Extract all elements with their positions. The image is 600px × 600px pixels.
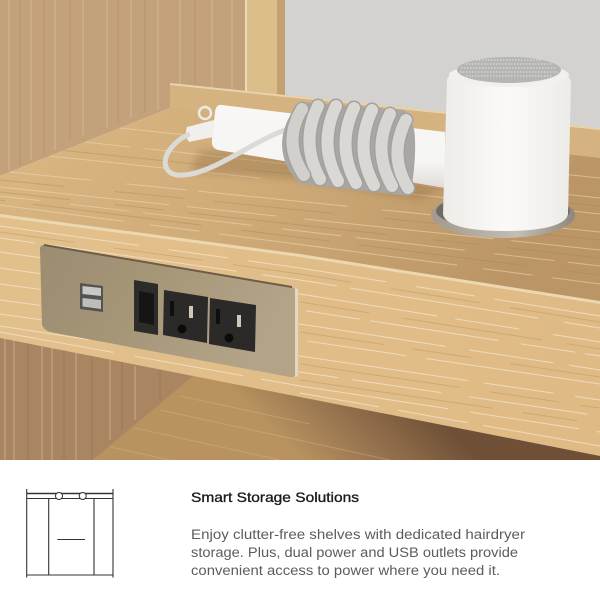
usb ports	[80, 283, 103, 312]
hairdryer	[165, 57, 571, 231]
hairdryer grille	[457, 57, 561, 83]
hairdryer barrel	[443, 67, 571, 231]
power cord	[165, 130, 285, 175]
hairdryer rim	[449, 63, 569, 87]
coiled cord	[282, 102, 415, 196]
body text: storage. Plus, dual power and USB outlets provide	[191, 545, 518, 560]
shelf top surface	[0, 108, 600, 302]
cabinet side panel	[0, 0, 245, 176]
wall	[285, 0, 600, 135]
body text: convenient access to power where you need it.	[191, 563, 500, 578]
body text: Enjoy clutter-free shelves with dedicated hairdryer	[191, 527, 526, 542]
icon: shelf elevation line drawing	[27, 489, 113, 578]
shelf front edge	[0, 214, 600, 456]
hairdryer handle	[212, 105, 445, 188]
heading: Smart Storage Solutions	[191, 489, 359, 505]
back ledge	[170, 83, 600, 160]
power panel	[40, 244, 298, 377]
outlet right	[209, 298, 256, 352]
body text	[191, 527, 526, 578]
hairdryer holder ring	[431, 192, 575, 238]
lower cabinet wall	[0, 330, 210, 460]
rocker switch	[134, 280, 158, 335]
hairdryer shadow	[190, 150, 440, 200]
hairdryer strain relief	[186, 120, 214, 142]
cabinet post	[245, 0, 285, 95]
panel: shelf photo	[0, 0, 600, 460]
hanging loop	[199, 107, 211, 119]
lower shelf	[93, 370, 600, 460]
outlet left	[163, 290, 208, 343]
